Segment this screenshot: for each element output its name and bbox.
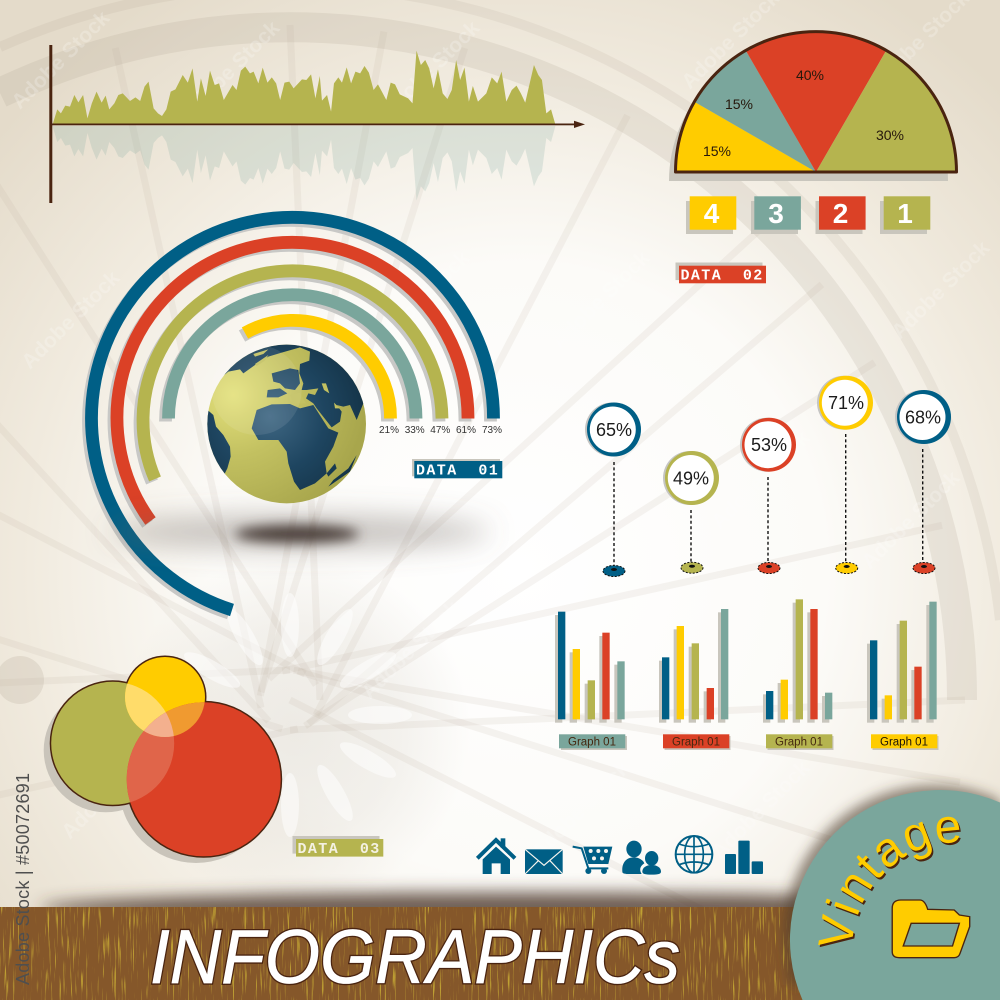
pin 49% bbox=[663, 451, 719, 573]
chart: radial rainbow arcs bbox=[89, 217, 494, 613]
arc percentages bbox=[379, 425, 502, 436]
arc 21% bbox=[245, 320, 391, 418]
watermark: Adobe Stock bbox=[707, 756, 815, 864]
watermark: Adobe Stock bbox=[17, 266, 125, 374]
icon: folder bbox=[892, 900, 970, 958]
watermark: Adobe Stock bbox=[357, 596, 465, 704]
watermark: Adobe Stock bbox=[527, 756, 635, 864]
arc percentages: 33% bbox=[405, 425, 425, 436]
venn red circle bbox=[127, 702, 281, 856]
watermark: Adobe Stock bbox=[177, 16, 285, 124]
legend boxes: 2 bbox=[833, 198, 848, 229]
venn overlaps bbox=[125, 684, 205, 802]
label: DATA 01: DATA 01 bbox=[416, 462, 499, 480]
badge shadow bbox=[784, 785, 1000, 985]
watermark: Adobe Stock bbox=[57, 736, 165, 844]
stock id text: Adobe Stock | #50072691 bbox=[13, 773, 33, 985]
badge text: Vintage: Vintage bbox=[820, 820, 961, 948]
pins bbox=[585, 376, 951, 576]
pin 68% bbox=[895, 390, 951, 574]
corner badge bbox=[779, 776, 1000, 1000]
pin 68%: 68% bbox=[905, 408, 941, 428]
legend boxes: 4 bbox=[704, 198, 720, 229]
globe shadow bbox=[110, 516, 490, 548]
graph labels bbox=[559, 734, 938, 750]
bar chart 4 bbox=[867, 602, 937, 723]
axes bbox=[49, 45, 585, 203]
bar chart 1 bbox=[555, 612, 625, 723]
pin 65% bbox=[585, 402, 641, 576]
chart: waveform area bbox=[49, 45, 585, 203]
badge circle bbox=[790, 790, 1000, 1000]
legend boxes: 1 bbox=[897, 198, 913, 229]
icon: cart bbox=[573, 847, 612, 874]
badge text: Vintage: Vintage bbox=[818, 816, 960, 946]
arc 61% bbox=[117, 242, 468, 521]
title: INFOGRAPHICs bbox=[150, 915, 680, 1000]
arc percentages: 73% bbox=[482, 425, 502, 436]
chart: half pie bbox=[669, 32, 956, 181]
arc 73% bbox=[92, 217, 494, 610]
pie labels: 15% bbox=[725, 96, 753, 112]
watermark: Adobe Stock bbox=[857, 466, 965, 574]
arc shadows bbox=[89, 220, 491, 613]
pie labels bbox=[703, 67, 904, 159]
bottom band bbox=[0, 907, 1000, 1000]
arc percentages: 21% bbox=[379, 425, 399, 436]
watermark: Adobe Stock bbox=[547, 246, 655, 354]
pin 71% bbox=[817, 376, 873, 574]
pin 49%: 49% bbox=[673, 468, 709, 488]
graph labels: Graph 01 bbox=[775, 736, 823, 748]
icon: globe bbox=[207, 344, 366, 504]
arc 47% bbox=[143, 271, 442, 479]
arc 33% bbox=[168, 295, 416, 418]
icon: home bbox=[477, 838, 515, 874]
label: DATA 03: DATA 03 bbox=[298, 841, 381, 858]
icon: mail bbox=[525, 849, 563, 874]
waveform reflection bbox=[53, 126, 555, 201]
pie labels: 40% bbox=[796, 67, 824, 83]
graph labels: Graph 01 bbox=[880, 736, 928, 748]
legend boxes: 3 bbox=[768, 198, 784, 229]
venn shadow bbox=[44, 688, 273, 863]
venn diagram bbox=[44, 656, 282, 863]
watermark: Adobe Stock bbox=[707, 426, 815, 534]
pie labels: 15% bbox=[703, 143, 731, 159]
bar charts bbox=[555, 599, 937, 723]
band shadow bbox=[40, 892, 980, 924]
waveform bbox=[53, 51, 555, 125]
icons row bbox=[477, 836, 763, 875]
watermark: Adobe Stock bbox=[377, 16, 485, 124]
bar chart 3 bbox=[763, 599, 832, 723]
graph labels: Graph 01 bbox=[672, 736, 720, 748]
legend boxes bbox=[686, 196, 930, 234]
venn yellow circle bbox=[125, 657, 205, 737]
label: DATA 02: DATA 02 bbox=[680, 268, 764, 284]
icon: people bbox=[622, 841, 661, 875]
pin 53% bbox=[740, 418, 796, 574]
bar chart 2 bbox=[659, 609, 728, 723]
title: INFOGRAPHICs bbox=[150, 915, 680, 1000]
venn outline bbox=[50, 656, 282, 858]
pin 71%: 71% bbox=[828, 393, 864, 413]
venn olive circle bbox=[51, 682, 174, 805]
pin 65%: 65% bbox=[596, 420, 632, 440]
watermark: Adobe Stock bbox=[367, 246, 475, 354]
icon: bars bbox=[725, 841, 763, 874]
graph labels: Graph 01 bbox=[568, 736, 616, 748]
arc percentages: 47% bbox=[430, 425, 450, 436]
watermark: Adobe Stock bbox=[887, 236, 995, 344]
pie labels: 30% bbox=[876, 127, 904, 143]
arc percentages: 61% bbox=[456, 425, 476, 436]
pin 53%: 53% bbox=[751, 435, 787, 455]
watermark: Adobe Stock bbox=[7, 6, 115, 114]
icon: web globe bbox=[676, 836, 712, 873]
